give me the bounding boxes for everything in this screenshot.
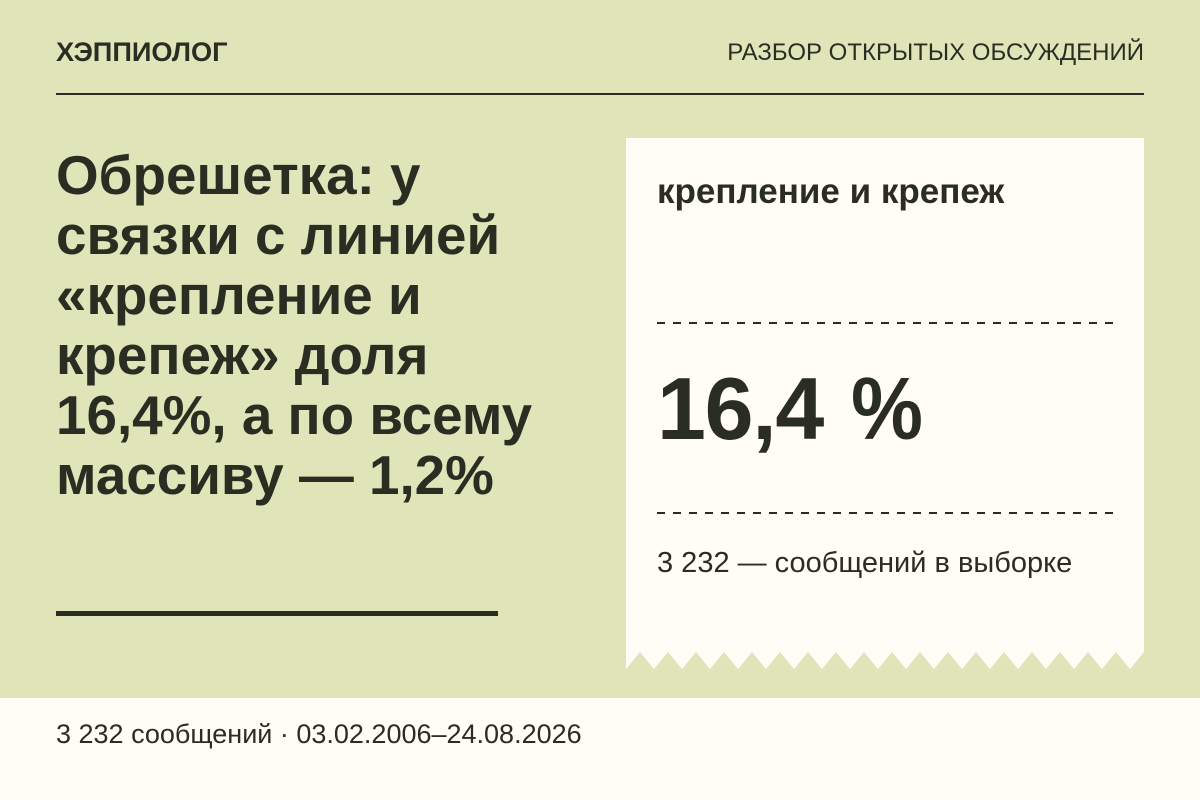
big value: 16,4 xyxy=(657,359,823,458)
footer bar xyxy=(0,698,1200,800)
big value: % xyxy=(851,359,922,458)
footer text: 3 232 сообщений · 03.02.2006–24.08.2026 xyxy=(56,719,582,749)
card background with zigzag edge xyxy=(626,138,1144,669)
header rule xyxy=(56,93,1144,95)
headline: массиву — 1,2% xyxy=(56,444,494,506)
brand name: ХЭППИОЛОГ xyxy=(56,36,228,67)
headline: Обрешетка: у xyxy=(56,144,421,206)
receipt card xyxy=(626,138,1144,669)
headline: связки с линией xyxy=(56,204,500,266)
headline accent rule xyxy=(56,611,498,616)
headline: крепеж» доля xyxy=(56,324,428,386)
card note: 3 232 — сообщений в выборке xyxy=(657,547,1072,579)
headline xyxy=(56,144,532,506)
big value xyxy=(657,359,922,458)
dashed divider bottom xyxy=(657,512,1113,514)
header caption: РАЗБОР ОТКРЫТЫХ ОБСУЖДЕНИЙ xyxy=(727,39,1144,66)
headline: 16,4%, а по всему xyxy=(56,384,532,446)
card label: крепление и крепеж xyxy=(657,172,1004,210)
headline: «крепление и xyxy=(56,264,422,326)
dashed divider top xyxy=(657,322,1113,324)
